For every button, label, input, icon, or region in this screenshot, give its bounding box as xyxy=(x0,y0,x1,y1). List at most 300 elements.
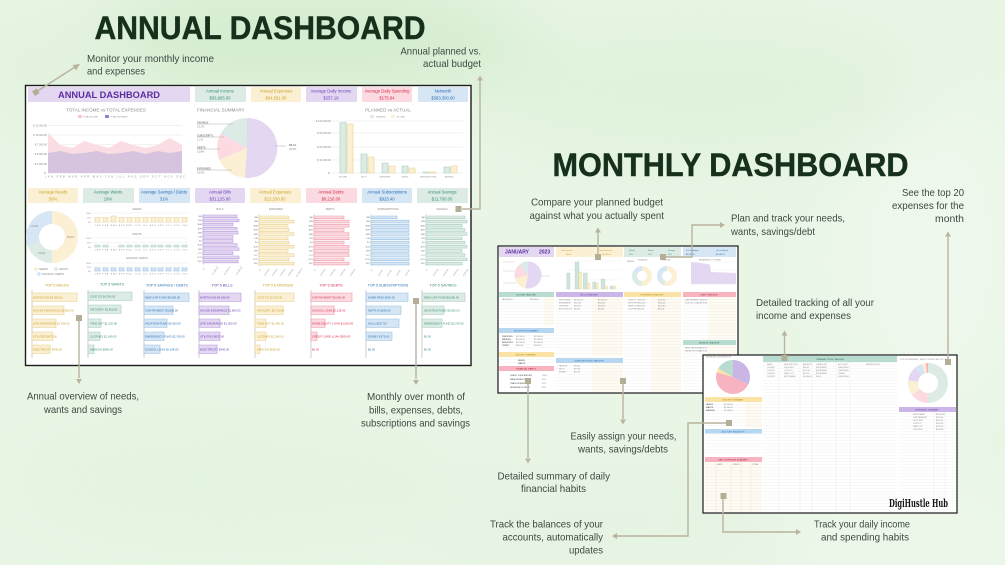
horizontal bars: debts: OCT xyxy=(309,255,314,257)
top 5 bills: TOP 5 BILLS xyxy=(211,284,233,288)
transactions table: BILLS xyxy=(816,376,822,378)
annotation: compare budget: against what you actually spent xyxy=(530,211,664,222)
monthly KPI cards: $3,087.00 xyxy=(686,254,696,256)
bills table: $2,000.00 xyxy=(598,300,608,302)
top KPI cards: Networth xyxy=(435,88,452,94)
top 5 bills: UTILITIES $675.00 xyxy=(200,334,224,338)
monthly KPI cards: $0.00 xyxy=(566,254,572,256)
monthly stepped area chart xyxy=(690,258,736,285)
top 5 savings: $0.00 xyxy=(424,348,431,352)
accounts table: $1,000.00 xyxy=(516,342,526,344)
daily spending table xyxy=(705,457,762,512)
horizontal bars: expenses xyxy=(254,207,304,278)
pie chart: financial summary: 49.3% xyxy=(289,147,297,151)
top KPI cards xyxy=(195,87,468,102)
financial habits table: 100% xyxy=(542,375,547,377)
horizontal bars: debts: DEC xyxy=(309,263,314,265)
bar chart: planned vs actual: $ - xyxy=(328,171,331,175)
top expenses table: TAKE OUT xyxy=(913,425,924,428)
transactions table: CREDIT xyxy=(838,373,846,375)
monthly KPI cards xyxy=(556,247,736,257)
savings summary table xyxy=(499,352,554,365)
subscriptions table: HULU xyxy=(559,368,565,370)
donut chart: needs wants savings: SAVINGS / DEBTS xyxy=(42,272,64,276)
top KPI cards: Average Daily Spending xyxy=(365,88,410,94)
bills table: $150.00 xyxy=(598,302,606,304)
top 5 wants: TAKE OUT $1,220.00 xyxy=(90,322,117,326)
horizontal bars: debts: JUN xyxy=(309,238,314,240)
bar chart: planned vs actual: $ 30,000.00 xyxy=(317,158,332,162)
arrow: monthly over month xyxy=(413,298,419,385)
top expenses table: UTILITIES xyxy=(913,429,923,431)
arrow: monitor income xyxy=(32,64,80,96)
horizontal bars: savings: OCT xyxy=(421,255,426,257)
budget summary table: $3,000.00 xyxy=(724,404,734,406)
column chart: wants: 50% xyxy=(87,242,91,244)
column chart: needs: NEEDS xyxy=(133,207,142,211)
transactions table: CHECKING xyxy=(838,370,849,372)
monthly KPI cards: Needs xyxy=(629,250,635,252)
horizontal bars: bills: BILLS xyxy=(216,207,224,211)
top 5 savings debts: EMERGENCY FUND $2,700.00 xyxy=(145,334,185,338)
second row KPI cards: Average Needs xyxy=(39,190,67,194)
horizontal bars: savings: JUN xyxy=(421,238,426,240)
monthly stepped area chart: REMAINING TO SPEND xyxy=(699,258,722,262)
top 5 needs: MORTGAGE $4,000.00 xyxy=(33,296,63,300)
top 5 debts: TOP 5 DEBTS xyxy=(319,284,343,288)
donut chart: needs wants savings: NEEDS xyxy=(39,267,48,271)
column chart: wants: WANTS xyxy=(132,232,142,236)
financial habits table: REVIEW ACCOUNTS xyxy=(510,386,530,389)
accounts table: $4,000.00 xyxy=(534,339,544,341)
expenses table: TAKE OUT xyxy=(628,304,639,308)
horizontal bars: savings: $ 200.00 xyxy=(433,268,440,277)
area chart: total income vs total expenses: JAN FEB MAR APR MAY JUN JUL AUG SEP OCT NOV DEC xyxy=(45,174,185,178)
horizontal bars: debts: JAN xyxy=(309,216,314,219)
pie chart: financial summary: 12.8% xyxy=(197,150,205,154)
horizontal bars: expenses: NOV xyxy=(254,259,259,261)
pie chart: financial summary: 13.2% xyxy=(197,124,205,128)
monthly KPI cards: 31% xyxy=(668,254,672,256)
transactions table: EXPENSES xyxy=(816,367,827,369)
top 5 wants: TOP 5 WANTS xyxy=(100,282,125,286)
column chart: needs: JAN FEB MAR APR MAY JUN JUL AUG SEP OCT NOV DEC xyxy=(95,224,189,227)
bar chart: planned vs actual: PLANNED vs ACTUAL xyxy=(365,108,411,112)
subscriptions table xyxy=(556,358,623,392)
top expenses table: MORTGAGE xyxy=(913,413,925,416)
top 5 savings debts: SCHOOL LOAN $2,108.00 xyxy=(145,348,179,352)
annotation: monthly over month: Monthly over month of xyxy=(367,392,465,403)
horizontal bars: bills: DEC xyxy=(198,261,203,263)
column chart: savings debts: SAVINGS / DEBTS xyxy=(126,256,148,260)
horizontal bars: expenses: EXPENSES xyxy=(269,207,283,211)
savings summary table: BUDGET SUMMARY xyxy=(516,353,537,356)
expenses table: $225.00 xyxy=(638,300,646,302)
accounts table: SAVINGS xyxy=(502,338,511,341)
annotation: account balances: updates xyxy=(569,546,603,556)
top 5 subscriptions xyxy=(366,284,409,358)
horizontal bars: debts: MAR xyxy=(309,224,314,227)
top 5 subscriptions: DISNEY $179.00 xyxy=(368,334,390,338)
second row KPI cards: $31,125.00 xyxy=(210,196,231,202)
annotation: annual overview: wants and savings xyxy=(43,405,122,416)
transactions table: EXPENSES xyxy=(816,370,827,372)
second row KPI cards: $12,530.00 xyxy=(265,196,286,202)
top 5 bills: LIFE INSURANCE $1,000.00 xyxy=(200,322,237,326)
top 5 subscriptions: HULU $227.50 xyxy=(368,322,387,326)
monthly donut charts: PLANNED xyxy=(638,258,648,262)
horizontal bars: savings: APR xyxy=(421,229,426,232)
column chart: savings debts xyxy=(86,256,189,276)
horizontal bars: savings: $ 400.00 xyxy=(443,268,450,277)
horizontal bars: debts: FEB xyxy=(309,221,314,223)
second row KPI cards: Average Wants xyxy=(94,190,122,194)
top 5 savings debts xyxy=(144,284,189,358)
annotation: annual planned vs actual: actual budget xyxy=(423,59,481,70)
horizontal bars: expenses: APR xyxy=(254,229,259,232)
horizontal bars: subscriptions: OCT xyxy=(366,255,371,257)
arrow: detailed tracking xyxy=(782,330,788,361)
january banner xyxy=(499,247,554,257)
top 5 debts: HOME EQUITY LOAN $1,000.00 xyxy=(312,322,354,326)
transactions table: DATE xyxy=(767,363,773,366)
top 5 savings: VACATION FUND $3,000.00 xyxy=(424,308,460,312)
horizontal bars: debts: APR xyxy=(309,229,314,232)
horizontal bars: expenses: SEP xyxy=(254,251,259,253)
horizontal bars: subscriptions: APR xyxy=(366,229,371,232)
pie chart: financial summary xyxy=(197,108,297,178)
january banner: JANUARY xyxy=(505,250,530,256)
arrow: compare budget xyxy=(595,228,601,260)
horizontal bars: debts xyxy=(309,207,357,277)
top 5 subscriptions: GARB PASS $240.00 xyxy=(368,296,395,300)
budget summary table: BUDGET SUMMARY xyxy=(723,398,744,401)
top expenses table: CAR PAYMENT xyxy=(913,416,928,419)
monthly KPI cards: 19% xyxy=(648,254,652,256)
monthly KPI cards: Total Expenses xyxy=(599,249,613,252)
horizontal bars: subscriptions: JAN xyxy=(366,216,371,219)
debt table: $178.00 xyxy=(700,302,708,304)
second row KPI cards xyxy=(28,188,468,203)
accounts table: INVESTING xyxy=(502,342,513,344)
expenses table: GROCERY xyxy=(628,302,639,304)
transactions table: $120.00 xyxy=(803,370,811,372)
horizontal bars: subscriptions: NOV xyxy=(366,259,371,261)
second row KPI cards: Annual Expenses xyxy=(259,190,291,194)
accounts table: $500.00 xyxy=(534,345,542,347)
transactions table: MORTGAGE xyxy=(784,375,796,378)
second row KPI cards: $8,216.00 xyxy=(322,196,341,202)
bar chart: planned vs actual: EXPENSES xyxy=(380,176,391,178)
spending pie chart: SPENDING DISTRIBUTION xyxy=(706,356,732,358)
annotation: monitor income: Monitor your monthly income xyxy=(87,54,214,65)
transactions table: CHECKING xyxy=(838,367,849,369)
financial habits table: CHECK YOUR BUDGET xyxy=(510,375,533,377)
spending pie chart xyxy=(706,356,742,386)
horizontal bars: debts: SEP xyxy=(309,251,314,253)
second row KPI cards: Annual Bills xyxy=(209,190,231,194)
top 5 savings debts: TOP 5 SAVINGS / DEBTS xyxy=(146,284,189,288)
savings table: $500.00 xyxy=(700,348,708,350)
horizontal bars: debts: $ - xyxy=(314,268,317,272)
horizontal bars: expenses: FEB xyxy=(254,221,259,223)
arrow: easily assign xyxy=(620,378,626,424)
budget summary table: SAVINGS xyxy=(706,409,715,412)
top 5 debts: SCHOOL LOAN $2,136.00 xyxy=(312,308,346,312)
bar chart: planned vs actual: SAVINGS xyxy=(445,176,454,178)
bar chart: planned vs actual: ACTUAL xyxy=(397,116,406,118)
expenses table: $300.00 xyxy=(658,302,666,304)
transactions table: 1/2/2023 xyxy=(767,370,776,372)
income table: $8,000.00 xyxy=(530,299,540,301)
horizontal bars: bills xyxy=(198,207,244,276)
horizontal bars: savings: JUL xyxy=(421,242,426,244)
expenses table: $80.00 xyxy=(658,308,665,310)
horizontal bars: savings: MAR xyxy=(421,224,426,227)
accounts table xyxy=(499,328,554,350)
horizontal bars: savings: NOV xyxy=(421,259,426,261)
top 5 wants: AMAZON $590.00 xyxy=(90,348,113,352)
horizontal bars: subscriptions: $ 80.00 xyxy=(405,269,411,277)
top expenses table: $300.00 xyxy=(936,420,944,422)
bills table: UTILITIES xyxy=(559,306,569,308)
top 20 expenses donut chart: TOP 20 EXPENSES · SELECT FROM THE TOP LIST xyxy=(900,359,949,361)
horizontal bars: bills: OCT xyxy=(198,253,203,255)
transactions table: $45.00 xyxy=(803,373,810,375)
accounts table: CREDIT xyxy=(502,345,510,347)
transactions table: $80.00 xyxy=(803,367,810,369)
financial habits table: 90% xyxy=(542,383,546,385)
financial habits table: 50% xyxy=(542,387,546,389)
top 5 expenses: AMAZON $600.00 xyxy=(257,348,280,352)
bills table: $200.00 xyxy=(574,306,582,308)
horizontal bars: expenses: DEC xyxy=(254,263,259,265)
top 5 expenses: COSTCO $2,700.00 xyxy=(257,296,283,300)
arrow: detailed summary xyxy=(525,378,531,464)
monthly KPI cards: Wants xyxy=(648,249,654,252)
horizontal bars: bills: APR xyxy=(198,227,203,230)
monthly KPI cards: Left to Spend xyxy=(716,249,728,252)
donut chart: needs wants savings xyxy=(31,218,75,276)
donut chart: needs wants savings: 31.0% xyxy=(31,224,39,228)
bills table xyxy=(556,292,623,356)
top 5 savings xyxy=(422,284,465,358)
budget summary table: $1,500.00 xyxy=(724,410,734,412)
donut chart: needs wants savings: 19.0% xyxy=(38,251,46,255)
annotation: account balances: accounts, automatically xyxy=(502,532,604,544)
top 20 expenses donut chart xyxy=(900,359,949,398)
top KPI cards: Average Daily Income xyxy=(311,88,352,94)
top 5 needs: UTILITIES $675.00 xyxy=(33,334,57,338)
debt table: CAR PAYMENT xyxy=(685,298,700,302)
horizontal bars: expenses: $ - xyxy=(259,268,262,272)
bills table: $200.00 xyxy=(598,306,606,308)
pie chart: financial summary: EXPENSES xyxy=(197,166,211,170)
annual dashboard banner xyxy=(28,87,190,102)
horizontal bars: subscriptions: JUN xyxy=(366,238,371,240)
bar chart: planned vs actual: $ 90,000.00 xyxy=(317,131,332,135)
top 5 needs: TOP 5 NEEDS xyxy=(45,284,69,288)
accounts table: $1,000.00 xyxy=(534,342,544,344)
top 5 needs: HOUSE INSURANCE $1,800.00 xyxy=(33,308,74,312)
annotation: annual planned vs actual: Annual planned vs. xyxy=(400,46,481,58)
transactions table xyxy=(763,356,897,512)
annual dashboard banner: ANNUAL DASHBOARD xyxy=(58,90,160,101)
top KPI cards: Annual Expenses xyxy=(260,88,292,94)
top 5 bills xyxy=(199,284,241,358)
area chart: total income vs total expenses: $ 5,000.00 xyxy=(35,152,48,156)
donut chart: needs wants savings: 50.0% xyxy=(67,235,75,239)
transactions table: GROCERY xyxy=(784,367,795,369)
area chart: total income vs total expenses: $ 12,000.00 xyxy=(33,124,48,128)
pie chart: financial summary: FINANCIAL SUMMARY xyxy=(197,108,245,112)
horizontal bars: expenses: $ 1,000.00 xyxy=(296,268,304,278)
horizontal bars: subscriptions: SUBSCRIPTIONS xyxy=(377,207,399,211)
column chart: savings debts: 50% xyxy=(87,267,91,269)
annotation: monthly over month: bills, expenses, debts, xyxy=(369,406,463,416)
area chart: total income vs total expenses: $ 2,000.00 xyxy=(35,162,48,166)
horizontal bars: expenses: MAY xyxy=(254,233,259,236)
top 5 subscriptions: $0.00 xyxy=(368,348,375,352)
income table: INCOME TRACKER xyxy=(516,293,536,296)
annotation: top 20 expenses: See the top 20 xyxy=(902,188,964,199)
debt table: DEBT TRACKER xyxy=(701,293,718,296)
annotation: daily tracking: and spending habits xyxy=(821,532,909,544)
bills table: $60.00 xyxy=(574,308,581,310)
second row KPI cards: Average Savings / Debts xyxy=(141,190,187,194)
monthly KPI cards: 50% xyxy=(629,254,633,256)
horizontal bars: savings xyxy=(421,207,470,277)
subscriptions table: $15.00 xyxy=(574,372,581,374)
column chart: savings debts: JAN FEB MAR APR MAY JUN JUL AUG SEP OCT NOV DEC xyxy=(95,272,189,276)
top KPI cards: Annual Income xyxy=(206,88,235,94)
horizontal bars: bills: AUG xyxy=(198,244,202,247)
debt table: $300.00 xyxy=(700,300,708,302)
second row KPI cards: Annual Subscriptions xyxy=(367,190,407,194)
annotation: daily tracking: Track your daily income xyxy=(814,520,910,530)
horizontal bars: savings: SAVINGS xyxy=(436,207,448,211)
horizontal bars: savings: $ 800.00 xyxy=(463,268,470,277)
budget summary table: WANTS xyxy=(706,406,714,409)
top 5 wants: GROCERY $3,450.00 xyxy=(90,308,118,312)
top 5 expenses: CLOTHES $1,240.00 xyxy=(257,334,284,338)
accounts table: NETWORTH SUMMARY xyxy=(514,329,539,332)
top 5 savings debts: NEW CAR FUND $6,000.00 xyxy=(145,296,180,300)
column chart: needs: 0% xyxy=(88,222,91,224)
accounts table: $2,000.00 xyxy=(516,336,526,338)
financial habits table: SAVE MONEY DAILY xyxy=(510,378,530,381)
top expenses table: EXPENSES SUMMARY xyxy=(915,408,939,411)
top 5 subscriptions: TOP 5 SUBSCRIPTIONS xyxy=(368,284,409,288)
top 5 expenses: GROCERY $3,700.00 xyxy=(257,308,285,312)
bar chart: planned vs actual: SUBSCRIPTIONS xyxy=(420,176,437,178)
subscriptions table: NETFLIX xyxy=(559,366,568,368)
bar chart: planned vs actual xyxy=(316,108,463,178)
column chart: needs: 50% xyxy=(87,218,91,220)
horizontal bars: expenses: $ 800.00 xyxy=(288,268,295,277)
horizontal bars: subscriptions: $ - xyxy=(371,268,374,272)
horizontal bars: bills: MAY xyxy=(198,231,203,234)
horizontal bars: debts: AUG xyxy=(309,245,313,248)
top 5 expenses: TOP 5 EXPENSES xyxy=(263,284,294,288)
transactions table: ACCOUNT xyxy=(838,363,849,366)
bar chart: planned vs actual: $ 60,000.00 xyxy=(317,145,332,149)
horizontal bars: bills: NOV xyxy=(198,257,203,259)
subscriptions table: SUBSCRIPTIONS TRACKER xyxy=(575,359,604,362)
annotation: top 20 expenses: month xyxy=(935,214,964,225)
monthly KPI cards: Total Income xyxy=(561,249,573,252)
annotation: easily assign: Easily assign your needs, xyxy=(570,432,676,442)
savings table: $250.00 xyxy=(700,350,708,352)
transactions table: COSTCO xyxy=(784,370,793,372)
horizontal bars: debts: NOV xyxy=(309,259,314,261)
accounts table: $500.00 xyxy=(516,345,524,347)
column chart: needs: 100% xyxy=(86,213,91,215)
top expenses table: $2,000.00 xyxy=(936,414,946,416)
expenses table: $80.00 xyxy=(638,308,645,310)
annotation: annual overview: Annual overview of needs, xyxy=(27,392,139,402)
financial habits table: FINANCIAL HABITS xyxy=(516,367,536,370)
january banner: 2023 xyxy=(539,250,550,256)
horizontal bars: subscriptions: FEB xyxy=(366,221,371,223)
horizontal bars: bills: $ 1,000.00 xyxy=(212,266,220,276)
annotation: detailed summary: Detailed summary of daily xyxy=(498,472,611,482)
second row KPI cards: $11,700.00 xyxy=(432,196,453,202)
horizontal bars: bills: FEB xyxy=(198,220,203,222)
horizontal bars: debts: DEBTS xyxy=(326,207,335,211)
monthly KPI cards: $5,985.00 xyxy=(602,254,612,256)
transactions table: AMOUNT xyxy=(803,363,812,366)
second row KPI cards: 19% xyxy=(104,196,112,202)
expenses table xyxy=(624,292,681,392)
horizontal bars: subscriptions: $ 20.00 xyxy=(378,269,384,277)
top KPI cards: $175.84 xyxy=(379,96,395,100)
monthly KPI cards: $3,982.00 xyxy=(716,254,726,256)
horizontal bars: bills: $ - xyxy=(203,267,206,271)
bills table: $150.00 xyxy=(574,302,582,304)
top 5 bills: ELECTRICITY $540.00 xyxy=(200,348,229,352)
top KPI cards: $93,865.00 xyxy=(210,96,231,100)
top 5 wants xyxy=(88,282,132,358)
area chart: total income vs total expenses: TOTAL INCOME vs TOTAL EXPENSES xyxy=(66,108,146,112)
top 5 wants: COSTCO $4,700.00 xyxy=(90,294,116,298)
top KPI cards: $257.16 xyxy=(323,96,339,100)
bills table: $60.00 xyxy=(598,308,605,310)
bills table: ELECTRICITY xyxy=(559,308,573,310)
top 5 wants: CLOTHES $1,240.00 xyxy=(90,334,117,338)
annotation: account balances: Track the balances of your xyxy=(490,520,604,530)
bar chart: planned vs actual: INCOME xyxy=(339,176,348,178)
expenses table: $120.00 xyxy=(638,306,646,308)
budget summary table xyxy=(705,397,762,428)
monthly pie chart xyxy=(503,262,550,283)
expenses table: EXPENSES TRACKER xyxy=(641,293,664,296)
transactions table: TRANSACTIONS TRACKER xyxy=(816,358,844,361)
horizontal bars: subscriptions: JUL xyxy=(366,242,371,244)
horizontal bars: bills: JUL xyxy=(198,241,203,243)
top 5 savings debts: CAR PAYMENT $3,600.00 xyxy=(145,308,178,312)
title: monthly dashboard: MONTHLY DASHBOARD xyxy=(552,147,908,183)
annotation: monthly over month: subscriptions and savings xyxy=(361,418,470,430)
account balances table xyxy=(705,429,762,456)
second row KPI cards: Annual Debts xyxy=(318,190,344,194)
monthly donut charts xyxy=(627,258,674,284)
bar chart: planned vs actual: $ 120,000.00 xyxy=(316,119,332,123)
column chart: wants xyxy=(86,232,189,252)
top 5 expenses xyxy=(255,284,294,358)
area chart: total income vs total expenses: $ 7,000.00 xyxy=(35,143,48,147)
horizontal bars: expenses: $ 600.00 xyxy=(280,268,287,277)
